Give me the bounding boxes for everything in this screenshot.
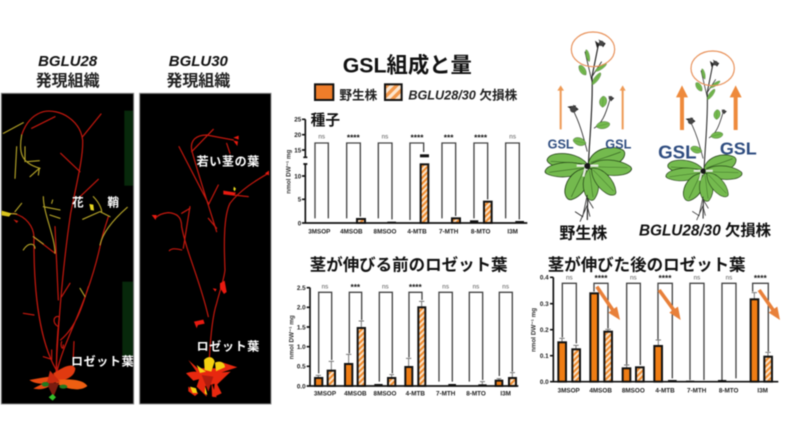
- y tick labels: 2.5: [297, 285, 306, 292]
- y tick labels: 25: [294, 117, 302, 124]
- panel: BGLU28 expression: [1, 53, 134, 404]
- legend: knockout: [385, 84, 518, 102]
- label: silique: 鞘: [107, 195, 119, 209]
- title: GSL組成と量: [343, 54, 472, 78]
- x labels: 8MSOO: [374, 228, 396, 235]
- circle: knockout apex: [691, 51, 734, 86]
- x labels: 8-MTO: [719, 388, 739, 395]
- x labels: 8MSOO: [374, 390, 396, 397]
- y tick labels: 2.0: [297, 305, 306, 312]
- rosette leaves: [53, 365, 75, 381]
- significance labels: ****: [409, 282, 423, 292]
- y axis title: nmol DW⁻¹ mg: [286, 149, 293, 194]
- arrow: decrease I3M: [758, 289, 780, 320]
- x labels: 3MSOP: [314, 390, 336, 397]
- significance labels: ns: [382, 283, 389, 290]
- y tick labels: 0.1: [540, 353, 549, 360]
- significance labels: ****: [595, 273, 608, 283]
- x labels: 3MSOP: [558, 388, 580, 395]
- error bars: [316, 301, 515, 384]
- x labels: 4-MTB: [407, 228, 427, 235]
- chart: rosette after bolting: [530, 255, 780, 395]
- x labels: 7-MTH: [687, 388, 707, 395]
- x labels: 4-MTB: [406, 390, 425, 397]
- chart heading: 種子: [311, 112, 340, 129]
- significance labels: ***: [444, 132, 454, 142]
- x labels: 4MSOB: [344, 390, 367, 397]
- photo: fluorescent plant: [2, 111, 127, 401]
- arrow: knockout left: [676, 85, 688, 130]
- x labels: I3M: [757, 388, 768, 395]
- legend: knockout: BGLU28/30 欠損株: [408, 87, 518, 102]
- significance labels: ***: [350, 282, 361, 292]
- x labels: 8-MTO: [466, 390, 486, 397]
- y tick labels: 0.0: [540, 379, 549, 386]
- label: young stem leaf: 若い茎の葉: [197, 153, 260, 168]
- arrow: decrease 4MSOB: [595, 286, 620, 320]
- arrow: decrease 4-MTB: [658, 289, 681, 320]
- x labels: 4MSOB: [589, 388, 612, 395]
- heading: BGLU30: BGLU30: [169, 53, 229, 70]
- significance labels: ns: [726, 274, 732, 281]
- arrow: knockout right: [730, 85, 742, 130]
- plant: knockout: [665, 60, 742, 220]
- bars: [315, 307, 516, 386]
- label: wild type: 野生株: [559, 224, 607, 242]
- y tick labels: 10: [294, 173, 302, 180]
- legend: wild type: 野生株: [339, 87, 378, 102]
- significance labels: ****: [347, 132, 361, 142]
- significance labels: ns: [382, 134, 388, 141]
- y tick labels: [540, 275, 549, 386]
- label: flower: 花: [72, 195, 84, 209]
- significance labels: ns: [630, 274, 637, 281]
- bars: [558, 293, 772, 382]
- label: GSL wild type left: GSL: [548, 138, 574, 152]
- y tick labels: [294, 117, 302, 227]
- y tick labels: 5: [298, 197, 302, 204]
- y tick labels: 0.5: [297, 364, 306, 371]
- significance labels: ****: [411, 132, 424, 142]
- photo background: [1, 93, 134, 404]
- axes: [307, 288, 518, 386]
- y tick labels: 0.3: [540, 301, 549, 308]
- y tick labels: 0.0: [297, 383, 306, 390]
- x labels: 7-MTH: [439, 228, 459, 235]
- label: GSL knockout left: GSL: [658, 141, 696, 162]
- x labels: 3MSOP: [308, 228, 330, 235]
- significance labels: ****: [659, 273, 672, 283]
- y tick labels: 0.4: [540, 275, 549, 282]
- plant: wild type: [544, 39, 632, 222]
- label: GSL knockout right: GSL: [720, 138, 757, 158]
- significance labels: ****: [474, 132, 488, 142]
- circle: wild type apex: [571, 32, 615, 67]
- chart: seed: [286, 112, 527, 235]
- significance labels: [322, 282, 509, 292]
- x labels: 8MSOO: [622, 388, 645, 395]
- x labels: 4-MTB: [655, 388, 675, 395]
- significance labels: ns: [502, 283, 509, 290]
- axes: [550, 277, 778, 382]
- chart heading: 茎が伸びる前のロゼット葉: [310, 255, 508, 275]
- brackets: [562, 283, 768, 380]
- arrow: wild type right: [620, 85, 626, 129]
- y tick labels: [297, 285, 306, 390]
- y tick labels: 15: [294, 147, 302, 154]
- y tick labels: 0: [298, 220, 302, 227]
- y axis title: nmol DW⁻¹ mg: [530, 308, 537, 352]
- x labels: 4MSOB: [340, 228, 363, 235]
- x labels: 8-MTO: [471, 228, 491, 235]
- photo background: [140, 93, 271, 404]
- x labels: [308, 228, 518, 235]
- heading: expression tissue: 発現組織: [166, 72, 230, 90]
- panel: plant diagrams: [544, 32, 772, 242]
- y tick labels: 20: [294, 132, 302, 139]
- heading: expression tissue: 発現組織: [36, 72, 100, 90]
- panel: BGLU30 expression: [140, 53, 271, 404]
- label: knockout: BGLU28/30 欠損株: [639, 221, 772, 239]
- photo: fluorescent plant: [152, 129, 269, 397]
- significance labels: ns: [694, 274, 700, 281]
- significance labels: [318, 132, 516, 142]
- significance labels: [566, 273, 768, 283]
- x labels: [558, 388, 768, 395]
- significance labels: ns: [509, 134, 516, 141]
- y tick labels: 0.2: [540, 327, 549, 334]
- significance labels: ns: [473, 283, 479, 290]
- significance labels: ****: [754, 273, 768, 283]
- heading and legend: [315, 54, 518, 102]
- label: rosette leaf: ロゼット葉: [197, 338, 260, 353]
- significance labels: ns: [322, 283, 328, 290]
- brackets: [319, 292, 512, 382]
- error bars: [559, 293, 771, 368]
- y axis title: nmol DW⁻¹ mg: [288, 315, 295, 359]
- axes: [302, 119, 527, 223]
- x labels: 7-MTH: [436, 390, 456, 397]
- y tick labels: 1.0: [297, 344, 306, 351]
- chart heading: 茎が伸びた後のロゼット葉: [548, 255, 746, 275]
- significance labels: ns: [442, 283, 449, 290]
- significance labels: ns: [566, 274, 573, 281]
- y tick labels: 1.5: [297, 324, 306, 331]
- chart: rosette before bolting: [288, 255, 518, 397]
- arrow: wild type left: [557, 85, 564, 129]
- x labels: I3M: [507, 228, 518, 235]
- heading: BGLU28: BGLU28: [38, 53, 98, 70]
- x labels: I3M: [500, 390, 511, 397]
- rosette leaves: [186, 360, 237, 397]
- brackets: [315, 143, 519, 220]
- legend: wild type: [315, 84, 378, 102]
- bars: [357, 154, 524, 223]
- significance labels: ns: [318, 134, 325, 141]
- label: GSL wild type right: GSL: [605, 138, 632, 152]
- label: rosette leaf: ロゼット葉: [71, 353, 134, 368]
- x labels: [314, 390, 511, 397]
